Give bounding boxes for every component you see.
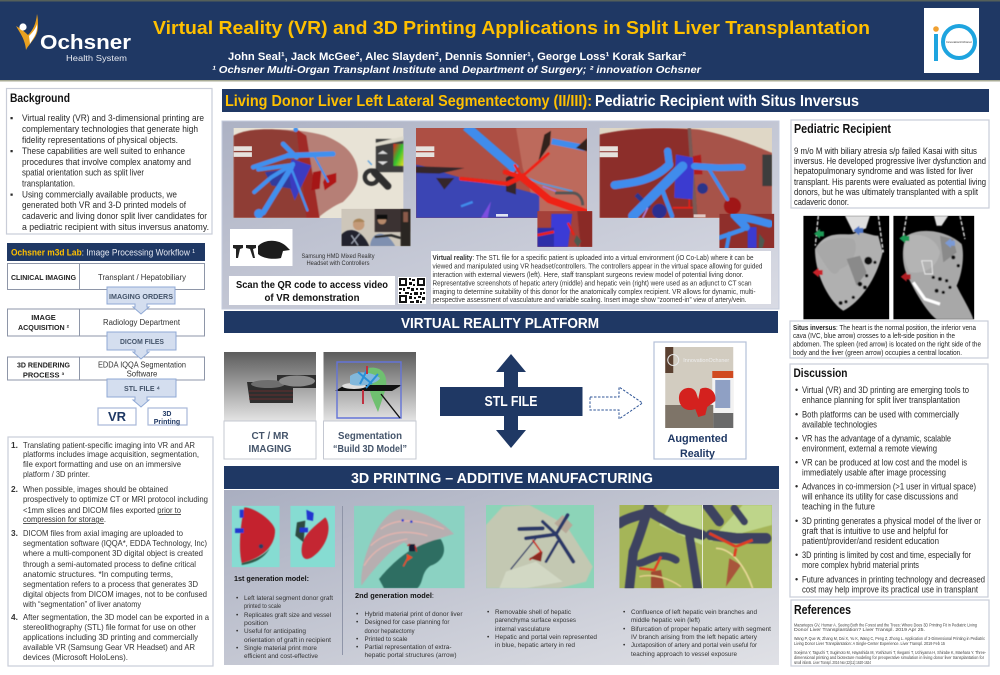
background bullets: ▪ (10, 146, 13, 156)
text: virtual reality description: imaging to determine suitability of this donor for the anatomically complex recipient. VR allows for dynamic, multi- (432, 289, 756, 296)
image: coronal CT with arrows (803, 216, 890, 320)
text: second generation model: • (356, 619, 359, 626)
text: second generation model: Designed for case planning for (364, 619, 450, 626)
background bullets: procedures that involve complex anatomy and (22, 157, 191, 167)
background bullets: These capabilities are well suited to enhance (22, 146, 185, 156)
arrow chip: STL file (107, 379, 176, 407)
heading: virtual reality platform (224, 311, 778, 333)
image: model close-ups (619, 505, 772, 588)
photo: surgeons using VR headsets (341, 208, 411, 246)
panel: 3D printing (224, 490, 779, 665)
divider between model generations (342, 506, 344, 655)
reference list: Living Donor Liver Transplantation: A Single-Center Experience. Liver Transpl. 2019 Feb 15 (794, 641, 945, 646)
note 3: DICOM files from axial imaging are uploaded to (23, 528, 183, 538)
caption: headset (302, 253, 375, 267)
text: second generation model: Printed to scale (364, 636, 408, 643)
heading: 3D printing: 3D PRINTING – ADDITIVE MANUFACTURING (351, 470, 653, 487)
text: first generation model: Replicates graft size and vessel (244, 612, 331, 619)
note 2 (11, 484, 208, 524)
panel: situs inversus caption: cava (IVC, blue arrow) crosses to a left-side position in the (793, 333, 955, 340)
note 3: anatomic structures. *In computing terms, (23, 569, 173, 579)
note 2: 2. (11, 484, 18, 494)
logo: Ochsner Health System: Health System (66, 53, 127, 63)
discussion bullets: VR has the advantage of a dynamic, scalable (802, 434, 951, 444)
text: second generation model: • (356, 644, 359, 651)
workflow heading (7, 243, 205, 261)
title: Virtual Reality (VR) and 3D Printing Applications in Split Liver Transplantation (153, 17, 870, 38)
note 4: stereolithography (STL) file format for use on other (23, 622, 196, 632)
panel: situs inversus caption: Situs inversus: The heart is the normal position, the inferior vena (793, 325, 976, 332)
text: removable shell: in blue, hepatic artery in red (495, 642, 575, 649)
text: confluence and bifurcation: Confluence of left hepatic vein branches and (631, 609, 757, 616)
discussion bullets: graft that is intuitive to use and helpful for (802, 526, 948, 536)
logo: Ochsner Health System (16, 14, 131, 63)
image: first generation model front (232, 506, 280, 568)
discussion bullets: • (795, 385, 798, 395)
background bullets (10, 113, 209, 232)
note 3: digital objects from DICOM images, not to be confused (23, 589, 207, 599)
row: image acquisition: ACQUISITION ² (18, 323, 69, 332)
note 3: where a multi-component 3D digital object is created (22, 548, 203, 558)
text: confluence and bifurcation (623, 609, 771, 658)
text: removable shell: internal vasculature (495, 626, 550, 633)
note 4: applications including 3D printing and commercially (23, 632, 199, 642)
text: virtual reality description: Representative screenshots of hepatic artery (middle) and hepatic vein (right) were used as an adjunct to CT scan (432, 280, 752, 288)
panel: situs inversus caption: abdomen. The spleen (red arrow) is located on the right side of the (793, 342, 981, 348)
logo: innovation Ochsner iO (924, 8, 979, 73)
VR screenshot: hepatic artery (416, 128, 587, 218)
box: 3D printing: Printing (154, 419, 180, 426)
panel: situs inversus caption: body and the liver (green arrow) occupies a central location. (793, 350, 962, 357)
discussion bullets: • (795, 550, 798, 560)
text: second generation model: 2nd generation model: (355, 591, 434, 600)
background bullets: fidelity representations of physical objects. (22, 135, 178, 145)
text: confluence and bifurcation: middle hepatic vein (left) (631, 617, 700, 624)
note 4 (11, 612, 209, 662)
background bullets: generated both VR and 3-D printed models of (22, 200, 186, 210)
row: image acquisition: IMAGE (31, 313, 56, 322)
VR screenshot: hepatic vein (599, 128, 772, 218)
heading: references: References (794, 603, 851, 617)
text: first generation model: • (236, 645, 239, 652)
background bullets: spatial orientation such as split liver (22, 168, 144, 178)
note 1: platforms includes image acquisition, segmentation, (23, 449, 199, 459)
background bullets: cadaveric and living donor split liver candidates for (22, 211, 207, 221)
authors: John Seal¹, Jack McGee², Alec Slayden², Dennis Sonnier¹, George Loss¹ Korak Sarkar² (228, 51, 686, 63)
text: first generation model (234, 574, 333, 660)
affiliations: ¹ Ochsner Multi-Organ Transplant Institute and Department of Surgery; ² innovation Ochsner (212, 64, 702, 76)
discussion bullets: • (795, 434, 798, 444)
discussion bullets: • (795, 410, 798, 420)
background bullets: Virtual reality (VR) and 3-dimensional printing are (22, 113, 204, 123)
case description: cadaveric donor. (794, 197, 849, 207)
text: confluence and bifurcation: Juxtaposition of artery and portal vein useful for (631, 642, 758, 649)
arrow chip: DICOM files: DICOM FILES (120, 337, 164, 346)
note 1: Translating patient-specific imaging into VR and AR (23, 440, 195, 450)
row: 3D rendering process: PROCESS ³ (23, 370, 65, 380)
text: confluence and bifurcation: • (623, 609, 626, 616)
row: clinical imaging: CLINICAL IMAGING (11, 273, 76, 282)
discussion bullets: immediately usable after image processing (802, 468, 946, 478)
arrow chip: DICOM files (107, 332, 176, 359)
heading: pediatric recipient: Pediatric Recipient (794, 122, 892, 136)
background bullets: ▪ (10, 113, 13, 123)
text: first generation model: efficient and cost-effective (244, 653, 318, 660)
text: second generation model: • (356, 611, 359, 618)
image: first generation model back (290, 506, 335, 568)
text: first generation model: • (236, 628, 239, 635)
discussion bullets: Both platforms can be used with commercially (802, 410, 959, 420)
row: clinical imaging (8, 264, 204, 290)
panel: situs inversus caption (790, 321, 988, 358)
note 1 (11, 440, 199, 479)
text: first generation model: position (244, 620, 268, 627)
text: virtual reality description: perspective assessment of vasculature and variable scaling. Insert image show “zoomed-in” view of artery/vein. (432, 297, 747, 304)
panel: discussion (790, 364, 988, 597)
panel: segmentation: “Build 3D Model” (333, 444, 407, 455)
header banner (0, 0, 1000, 82)
box: 3D printing (148, 408, 187, 426)
note 2: When possible, images should be obtained (23, 484, 168, 494)
text: first generation model: Left lateral segment donor graft (244, 595, 333, 602)
logo: Ochsner Health System: Ochsner (40, 32, 131, 54)
note 1: platform / 3D printer. (23, 469, 90, 479)
arrow: dashed to augmented reality (590, 387, 642, 419)
note 2: compression for storage. (23, 514, 106, 524)
arrow chip: imaging orders (107, 287, 175, 314)
text: second generation model: donor hepatectomy (364, 628, 415, 635)
QR call to action: of VR demonstration (264, 292, 360, 304)
discussion bullets: • (795, 516, 798, 526)
image: sagittal CT with arrows (893, 216, 974, 320)
background bullets: transplantation. (22, 178, 75, 188)
text: first generation model: Single material print more (244, 645, 317, 652)
discussion bullets: VR can be produced at low cost and the model is (802, 458, 967, 468)
panel: augmented reality (654, 342, 746, 460)
logo: innovation Ochsner iO: InnovationOchsner (946, 40, 972, 44)
image: stacked CT slices (247, 375, 316, 403)
inset: zoomed artery (537, 211, 592, 247)
box: 3D printing: 3D (163, 411, 171, 418)
text: second generation model: Partial representation of extra- (364, 644, 452, 651)
note 3: through a semi-automated process to define critical (23, 559, 196, 569)
background bullets: Using commercially available products, we (22, 190, 177, 200)
discussion bullets: environment, external a remote viewing (802, 444, 937, 454)
case description: hepatopulmonary syndrome and was listed for liver (794, 166, 973, 176)
note 3: 3. (11, 528, 18, 538)
text: virtual reality description: Virtual reality: The STL file for a specific patient is uploaded into a virtual environment (iO Co-Lab) where it can be (432, 255, 754, 262)
text: second generation model: Hybrid material print of donor liver (364, 611, 463, 618)
text: removable shell: Removable shell of hepatic (495, 609, 572, 616)
arrow: STL file four-way: STL FILE (484, 394, 538, 410)
panel: virtual reality (222, 121, 779, 309)
text: first generation model: • (236, 612, 239, 619)
text: second generation model: hepatic portal structures (arrow) (364, 652, 456, 659)
row: 3D rendering process (8, 357, 204, 380)
text: first generation model: orientation of graft in recipient (244, 637, 331, 644)
reference list (794, 622, 986, 665)
row: image acquisition: Radiology Department (103, 318, 181, 327)
panel: pediatric recipient (791, 120, 989, 208)
note 1: 1. (11, 440, 18, 450)
text: removable shell (487, 609, 597, 649)
note 4: 4. (11, 612, 18, 622)
background bullets: ▪ (10, 190, 13, 200)
note 1: file export formatting and use on an immersive (23, 459, 181, 469)
panel: references (791, 600, 989, 666)
text: virtual reality description: viewed and manipulated using VR headset/controllers. The controllers appear in the virtual space allowing for guided (432, 264, 763, 270)
discussion bullets (795, 385, 985, 594)
workflow heading: Ochsner m3d Lab: Image Processing Workflow ¹ (11, 248, 195, 258)
discussion bullets: • (795, 482, 798, 492)
text: first generation model: • (236, 595, 239, 602)
discussion bullets: available technologies (802, 420, 877, 430)
caption: headset: Samsung HMD Mixed Reality (302, 253, 375, 260)
text: confluence and bifurcation: teaching approach to vessel exposure (631, 651, 737, 658)
image: 3D model build (335, 362, 402, 418)
text: virtual reality description (431, 251, 771, 304)
heading: discussion: Discussion (794, 366, 848, 380)
discussion bullets: will enhance its utility for case discussions and (801, 492, 958, 502)
center heading bar: Pediatric Recipient with Situs Inversus (595, 93, 859, 110)
background bullets: a pediatric recipient with situs inversus anatomy. (22, 222, 209, 232)
caption: headset: Headset with Controllers (306, 260, 370, 267)
discussion bullets: teaching in the future (802, 502, 875, 512)
discussion bullets: • (795, 458, 798, 468)
panel: segmentation: Segmentation (338, 431, 402, 442)
image: second generation vasculature (486, 505, 594, 588)
text: virtual reality description: interaction with external viewers (left). Here, staff transplant surgeons review model of potential living donor. (432, 272, 744, 279)
text: second generation model: • (356, 636, 359, 643)
panel: CT / MR imaging: CT / MR (252, 431, 289, 442)
arrow: STL file four-way (440, 354, 582, 448)
inset: zoomed vein (719, 214, 774, 248)
QR call to action: Scan the QR code to access video (236, 279, 388, 291)
note 4: available VR (Samsung Gear VR Headset) and AR (23, 642, 195, 652)
case description: 9 m/o M with biliary atresia s/p failed Kasai with situs (794, 146, 977, 156)
discussion bullets: enhance planning for split liver transplantation (802, 395, 960, 405)
panel: CT / MR imaging: IMAGING (248, 444, 292, 455)
discussion bullets: Virtual (VR) and 3D printing are emerging tools to (802, 385, 969, 395)
note 3: segmentation refers to a process that generates 3D (23, 579, 198, 589)
text: first generation model: 1st generation model: (234, 574, 309, 583)
panel: background (6, 88, 212, 234)
image: Samsung headset and controllers (230, 229, 292, 266)
note 4: devices (Microsoft HoloLens). (23, 652, 128, 662)
center heading bar: Living Donor Liver Left Lateral Segmentectomy (II/III): (225, 93, 592, 110)
box: VR: VR (108, 409, 127, 424)
text: confluence and bifurcation: • (623, 642, 626, 649)
panel: augmented reality: Augmented (668, 433, 728, 445)
discussion bullets: • (795, 574, 798, 584)
reference list: small infants. Liver Transpl. 2016 Nov;22(11):1620-1624 (794, 660, 871, 665)
note 2: <1mm slices and DICOM files exported prior to (23, 505, 181, 515)
panel: segmentation (324, 352, 416, 459)
note 3: with “segmentation” of liver anatomy (22, 599, 142, 609)
row: 3D rendering process: 3D RENDERING (17, 360, 70, 370)
row: 3D rendering process: Software (127, 370, 157, 378)
discussion bullets: patient/provider/and resident education (802, 536, 939, 546)
heading: 3D printing (224, 466, 779, 489)
panel: CT / MR imaging (224, 352, 316, 459)
text: confluence and bifurcation: • (623, 626, 626, 633)
background bullets: complementary technologies that generate high (22, 124, 198, 134)
text: removable shell: • (487, 609, 490, 616)
image: AR liver model: InnovationOchsner (683, 358, 730, 364)
note 4: After segmentation, the 3D model can be exported in a (23, 612, 209, 622)
heading: background: Background (10, 93, 70, 105)
center heading bar (222, 89, 989, 112)
text: removable shell: parenchyma surface exposes (495, 617, 577, 624)
panel: augmented reality: Reality (680, 448, 716, 460)
row: 3D rendering process: EDDA IQQA Segmentation (98, 360, 186, 370)
text: removable shell: Hepatic and portal vein represented (495, 634, 597, 641)
case description (794, 146, 986, 207)
note 2: prospectively to optimize CT or MRI protocol including (23, 494, 208, 504)
note 3 (11, 528, 207, 609)
text: confluence and bifurcation: IV branch arising from the left hepatic artery (631, 634, 758, 641)
panel: workflow notes (8, 437, 213, 666)
heading: virtual reality platform: VIRTUAL REALITY PLATFORM (401, 315, 599, 332)
QR call to action (229, 276, 395, 305)
VR screenshot: liver overview (233, 128, 404, 218)
note 3: segmentation software (IQQA*, EDDA Technology, Inc) (23, 538, 207, 548)
text: first generation model: printed to scale (244, 603, 281, 610)
QR code (398, 277, 426, 304)
discussion bullets: more complex hybrid material prints (802, 560, 919, 570)
text: confluence and bifurcation: Bifurcation of proper hepatic artery with segment (631, 626, 771, 633)
reference list: Donor Liver Transplantation? Liver Transpl. 2019 Apr 25. (794, 627, 925, 632)
arrow chip: imaging orders: IMAGING ORDERS (109, 292, 173, 301)
text: removable shell: • (487, 634, 490, 641)
arrow chip: STL file: STL FILE ⁴ (124, 384, 160, 393)
panel: image processing workflow (7, 243, 205, 426)
text: second generation model (355, 591, 463, 659)
row: image acquisition (8, 309, 204, 336)
text: first generation model: Useful for anticipating (244, 628, 306, 635)
box: VR (98, 408, 136, 425)
row: clinical imaging: Transplant / Hepatobiliary (98, 273, 186, 282)
image: second generation hybrid liver (354, 506, 464, 588)
